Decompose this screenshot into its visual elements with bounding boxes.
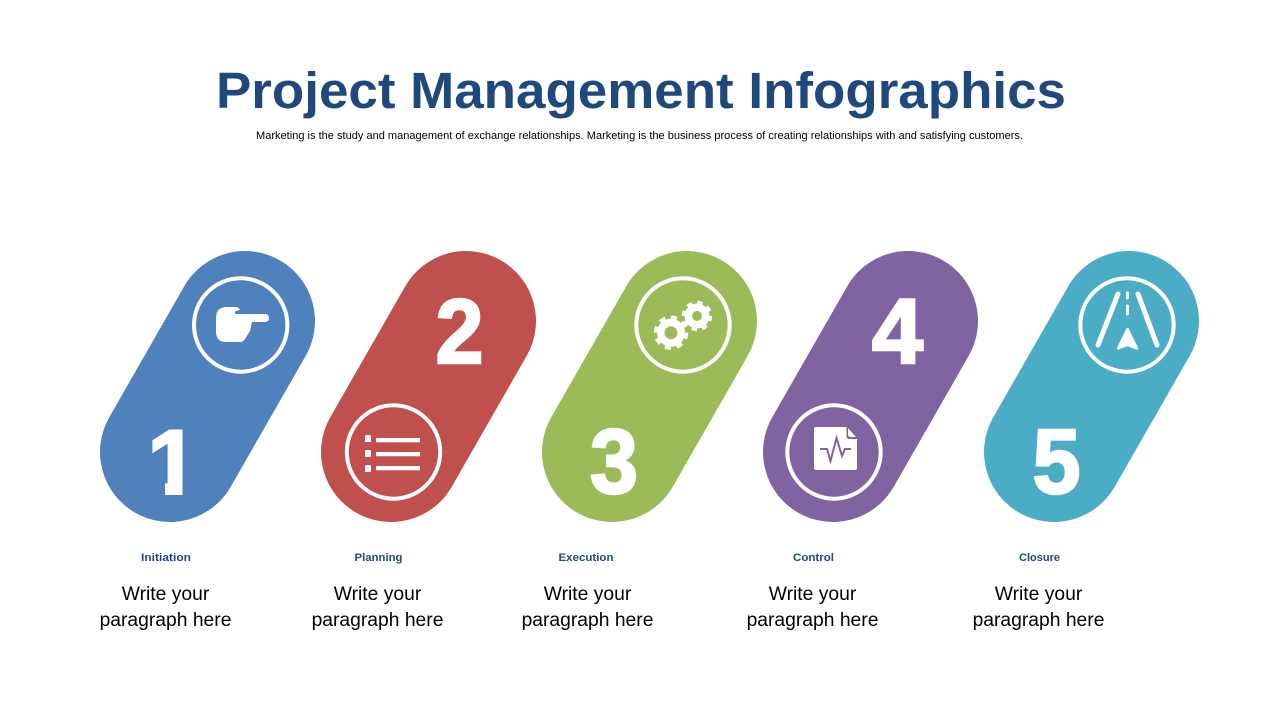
- number 4: 4: [872, 281, 923, 383]
- number 1: 1: [147, 412, 199, 514]
- label: Initiation: Initiation: [141, 552, 191, 564]
- paragraph: paragraph here: [312, 610, 443, 631]
- icon: road with arrow: [1080, 278, 1174, 372]
- icon: gears: [636, 278, 730, 372]
- pill: step 5: [1054, 321, 1129, 452]
- label: Closure: Closure: [1019, 552, 1060, 564]
- pill: step 3: [612, 321, 687, 452]
- paragraph: Write your: [122, 584, 210, 605]
- panel: step 1 initiation: [100, 278, 287, 631]
- paragraph: Write your: [995, 584, 1083, 605]
- icon: list: [347, 405, 440, 499]
- pill: step 4: [833, 321, 908, 452]
- paragraph: Write your: [769, 584, 857, 605]
- paragraph: Write your: [334, 584, 422, 605]
- paragraph: paragraph here: [522, 610, 653, 631]
- subtitle: Marketing is the study and management of exchange relationships. Marketing is the business process of creating relationships with and satisfying customers.: [256, 130, 1023, 142]
- panel: step 4 control: [747, 281, 923, 631]
- paragraph: paragraph here: [100, 610, 231, 631]
- label: Execution: Execution: [558, 552, 614, 564]
- title: Project Management Infographics: [216, 62, 1066, 119]
- panel: step 2 planning: [312, 281, 484, 631]
- paragraph: Write your: [544, 584, 632, 605]
- paragraph: paragraph here: [747, 610, 878, 631]
- pill: step 1: [170, 321, 245, 452]
- pill: step 2: [391, 321, 466, 452]
- label: Planning: Planning: [354, 552, 402, 564]
- panel: step 5 closure: [973, 278, 1174, 631]
- number 2: 2: [436, 281, 484, 383]
- paragraph: paragraph here: [973, 610, 1104, 631]
- label: Control: Control: [793, 552, 834, 564]
- number 3: 3: [590, 411, 638, 513]
- number 5: 5: [1032, 411, 1080, 513]
- icon: pointing hand: [194, 278, 287, 372]
- panel: step 3 execution: [522, 278, 730, 631]
- icon: document with pulse: [787, 405, 881, 499]
